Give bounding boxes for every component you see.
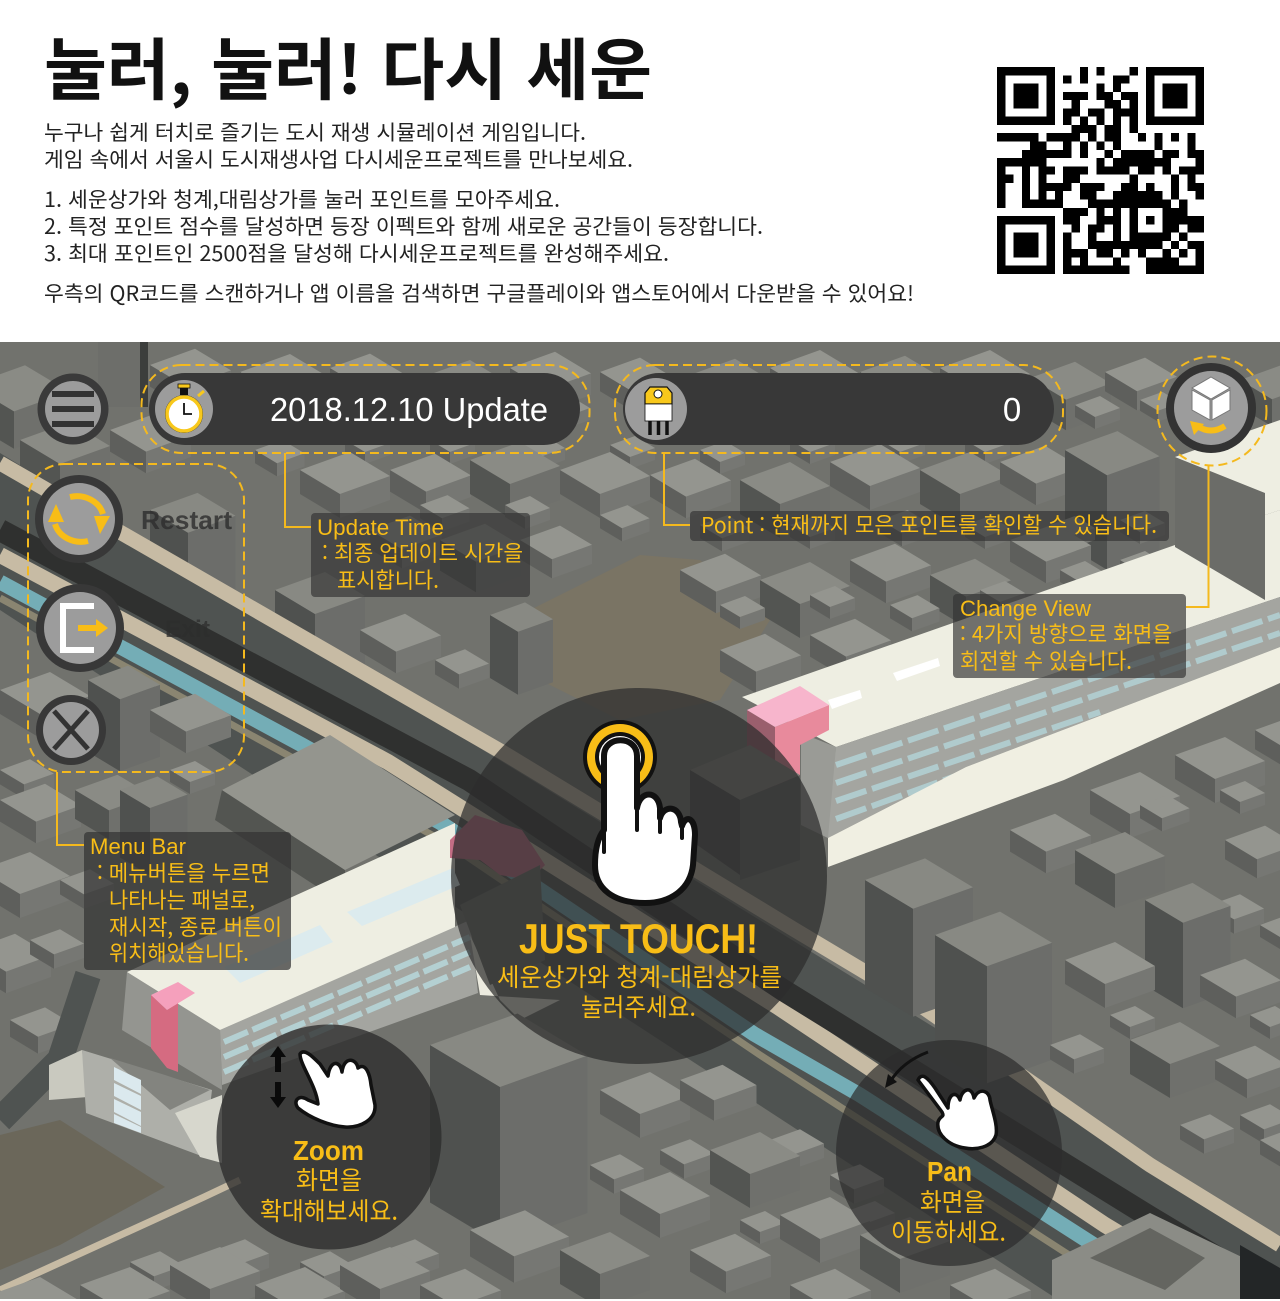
icon: exit door <box>63 606 94 650</box>
exit button <box>36 584 210 672</box>
upper district buildings <box>0 342 1280 704</box>
title: 눌러, 눌러! 다시 세운 <box>44 17 652 114</box>
dark corner <box>1240 1245 1280 1299</box>
pink block right <box>747 686 829 780</box>
callout: menu bar: Menu Bar <box>90 834 186 859</box>
pan text: 이동하세요. <box>891 1213 1006 1249</box>
city map background <box>0 342 1280 1301</box>
callout: menu bar: : 메뉴버튼을 누르면 <box>97 856 270 888</box>
tan sidewalk <box>0 463 1280 1245</box>
canal water <box>0 576 1098 1246</box>
pan overlay circle <box>836 1040 1062 1266</box>
callout: update time: 표시합니다. <box>337 563 439 595</box>
central building under circle <box>460 745 800 985</box>
exit button: Exit <box>165 616 210 643</box>
pink block left <box>151 982 195 1072</box>
icon: rotate arrows <box>55 496 103 542</box>
lower-left buildings <box>0 666 231 1054</box>
zoom overlay circle <box>216 1024 442 1250</box>
ground patch <box>535 555 770 702</box>
right Sewoon building <box>742 420 1280 867</box>
download note: 우측의 QR코드를 스캔하거나 앱 이름을 검색하면 구글플레이와 앱스토어에서 다운받을 수 있어요! <box>44 278 914 308</box>
update time highlight <box>142 365 590 453</box>
left dark curved road <box>0 975 88 1120</box>
callout: change view: Change View <box>960 596 1091 621</box>
instruction list: 2. 특정 포인트 점수를 달성하면 등장 이펙트와 함께 새로운 공간들이 등장합니다. <box>44 211 763 241</box>
bottom left buildings <box>0 1239 501 1301</box>
callout: update time: Update Time <box>317 515 444 540</box>
instruction list <box>44 184 763 268</box>
dark lane <box>0 530 1280 1295</box>
points pill <box>623 373 1054 445</box>
intro text block: 누구나 쉽게 터치로 즐기는 도시 재생 시뮬레이션 게임입니다. <box>44 117 586 147</box>
brown ground <box>0 1120 165 1270</box>
icon: pan hand <box>885 1052 996 1149</box>
callout: change view <box>953 594 1186 678</box>
callout: update time: : 최종 업데이트 시간을 <box>322 536 523 568</box>
just touch text: 눌러주세요. <box>581 988 696 1024</box>
change view button <box>1166 363 1256 453</box>
update time pill <box>149 373 580 445</box>
pink block centre <box>450 815 545 880</box>
just touch text: JUST TOUCH! <box>519 915 758 962</box>
pyramid roof building <box>1052 1213 1248 1301</box>
small white building <box>49 1050 222 1163</box>
change view connector <box>1186 466 1208 607</box>
left Sewoon building <box>122 823 560 1090</box>
zoom text: 확대해보세요. <box>260 1192 398 1228</box>
QR code <box>997 67 1204 274</box>
callout: menu bar: 나타나는 패널로, <box>109 883 255 915</box>
update time pill: 2018.12.10 Update <box>270 391 548 428</box>
menu connector <box>57 772 84 845</box>
zoom text: Zoom <box>293 1135 364 1166</box>
intro text block <box>44 117 633 174</box>
lower tan strip <box>0 548 1122 1234</box>
tall tower <box>1175 457 1265 600</box>
instruction list: 1. 세운상가와 청계,대림상가를 눌러 포인트를 모아주세요. <box>44 184 560 214</box>
callout: change view: : 4가지 방향으로 화면을 <box>960 617 1172 649</box>
restart button <box>35 475 232 563</box>
intro text block: 게임 속에서 서울시 도시재생사업 다시세운프로젝트를 만나보세요. <box>44 144 633 174</box>
callout: menu bar: 위치해있습니다. <box>109 936 249 968</box>
just touch text: 세운상가와 청계-대림상가를 <box>497 958 782 994</box>
menu panel highlight <box>28 464 244 772</box>
callout: menu bar <box>84 832 291 970</box>
zoom text: 화면을 <box>296 1161 362 1197</box>
change view highlight <box>1158 356 1266 466</box>
pan text: 화면을 <box>920 1183 985 1219</box>
callout: menu bar: 재시작, 종료 버튼이 <box>109 910 282 942</box>
pan text: Pan <box>927 1156 972 1187</box>
icon: zoom hand <box>270 1046 375 1127</box>
lower right buildings <box>865 716 1280 1169</box>
callout: update time <box>311 513 530 597</box>
road band <box>0 453 1280 1301</box>
callout: change view: 회전할 수 있습니다. <box>960 644 1132 676</box>
callout: point: Point : 현재까지 모은 포인트를 확인할 수 있습니다. <box>701 508 1157 540</box>
points pill: 0 <box>1003 391 1021 428</box>
lower centre buildings <box>430 1014 1031 1301</box>
just touch overlay circle <box>451 688 827 1064</box>
icon: transistor <box>645 387 672 435</box>
zoom text <box>260 1135 398 1228</box>
instruction list: 3. 최대 포인트인 2500점을 달성해 다시세운프로젝트를 완성해주세요. <box>44 238 669 268</box>
points connector <box>664 453 690 525</box>
pan text <box>891 1156 1006 1249</box>
icon: cube <box>1192 377 1230 420</box>
factory roof <box>215 735 455 886</box>
icon: touching hand <box>583 720 695 903</box>
update time connector <box>285 453 311 527</box>
just touch text <box>497 915 782 1024</box>
menu button <box>38 374 108 444</box>
restart button: Restart <box>141 505 232 535</box>
icon: stopwatch <box>165 384 204 433</box>
points highlight <box>615 365 1063 453</box>
close button <box>36 695 106 765</box>
